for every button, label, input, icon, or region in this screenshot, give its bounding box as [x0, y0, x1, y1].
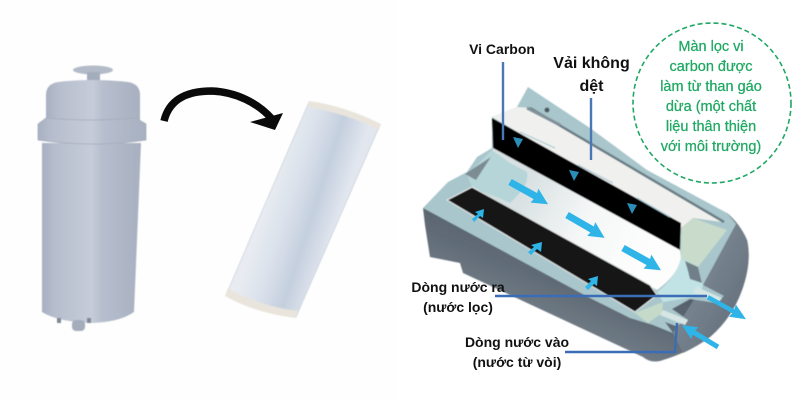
callout: green dashed circle: carbon được	[670, 59, 752, 75]
thin pale lines	[520, 132, 670, 217]
label: Vi Carbon: Vi Carbon	[469, 41, 535, 57]
pipe stubs	[660, 287, 722, 325]
callout: green dashed circle: Màn lọc vi	[678, 39, 744, 55]
icon: closed filter cartridge	[38, 66, 146, 331]
label: Vải không dệt: Vải không	[553, 55, 630, 72]
callout: green dashed circle: với môi trường)	[661, 139, 761, 155]
icon: blue water flow arrows	[472, 137, 750, 353]
callout: green dashed circle: liệu thân thiện	[666, 119, 756, 135]
callout: green dashed circle: làm từ than gáo	[660, 79, 762, 95]
label leader: Dòng nước vào	[565, 323, 677, 352]
light tube opening	[467, 150, 527, 203]
callout: green dashed circle	[633, 23, 791, 183]
label: Dòng nước ra (nước lọc): (nước lọc)	[423, 299, 493, 315]
arrow: black curved arrow	[164, 91, 283, 130]
panel: right filter cross-section diagram	[411, 23, 791, 370]
white inner tube	[480, 148, 681, 290]
end cap pale green	[681, 218, 727, 267]
label leader: Vi Carbon	[502, 62, 504, 140]
panel: left product photos	[0, 0, 397, 400]
illustration: cut-away filter housing	[423, 87, 749, 362]
outlet light area	[657, 258, 703, 302]
label leader: Vải không dệt	[590, 98, 592, 160]
upper carbon strip	[492, 118, 681, 250]
icon: white carbon filter roll	[225, 101, 381, 318]
outer lower shell	[423, 208, 749, 362]
label: Dòng nước ra (nước lọc): Dòng nước ra	[411, 279, 505, 295]
label leader: Dòng nước ra	[495, 295, 707, 297]
label: Dòng nước vào (nước từ vòi): (nước từ vòi)	[473, 354, 561, 370]
rim: pale blue cut surface	[423, 87, 736, 333]
lower pale green	[635, 302, 663, 323]
callout: green dashed circle: dừa (một chất	[666, 99, 756, 115]
right end cap	[673, 213, 749, 353]
label: Dòng nước vào (nước từ vòi): Dòng nước vào	[465, 334, 569, 350]
label: Vải không dệt: dệt	[580, 78, 604, 95]
dark rim line	[530, 108, 724, 222]
lower carbon strip	[447, 187, 657, 312]
white band above carbon	[492, 107, 722, 228]
